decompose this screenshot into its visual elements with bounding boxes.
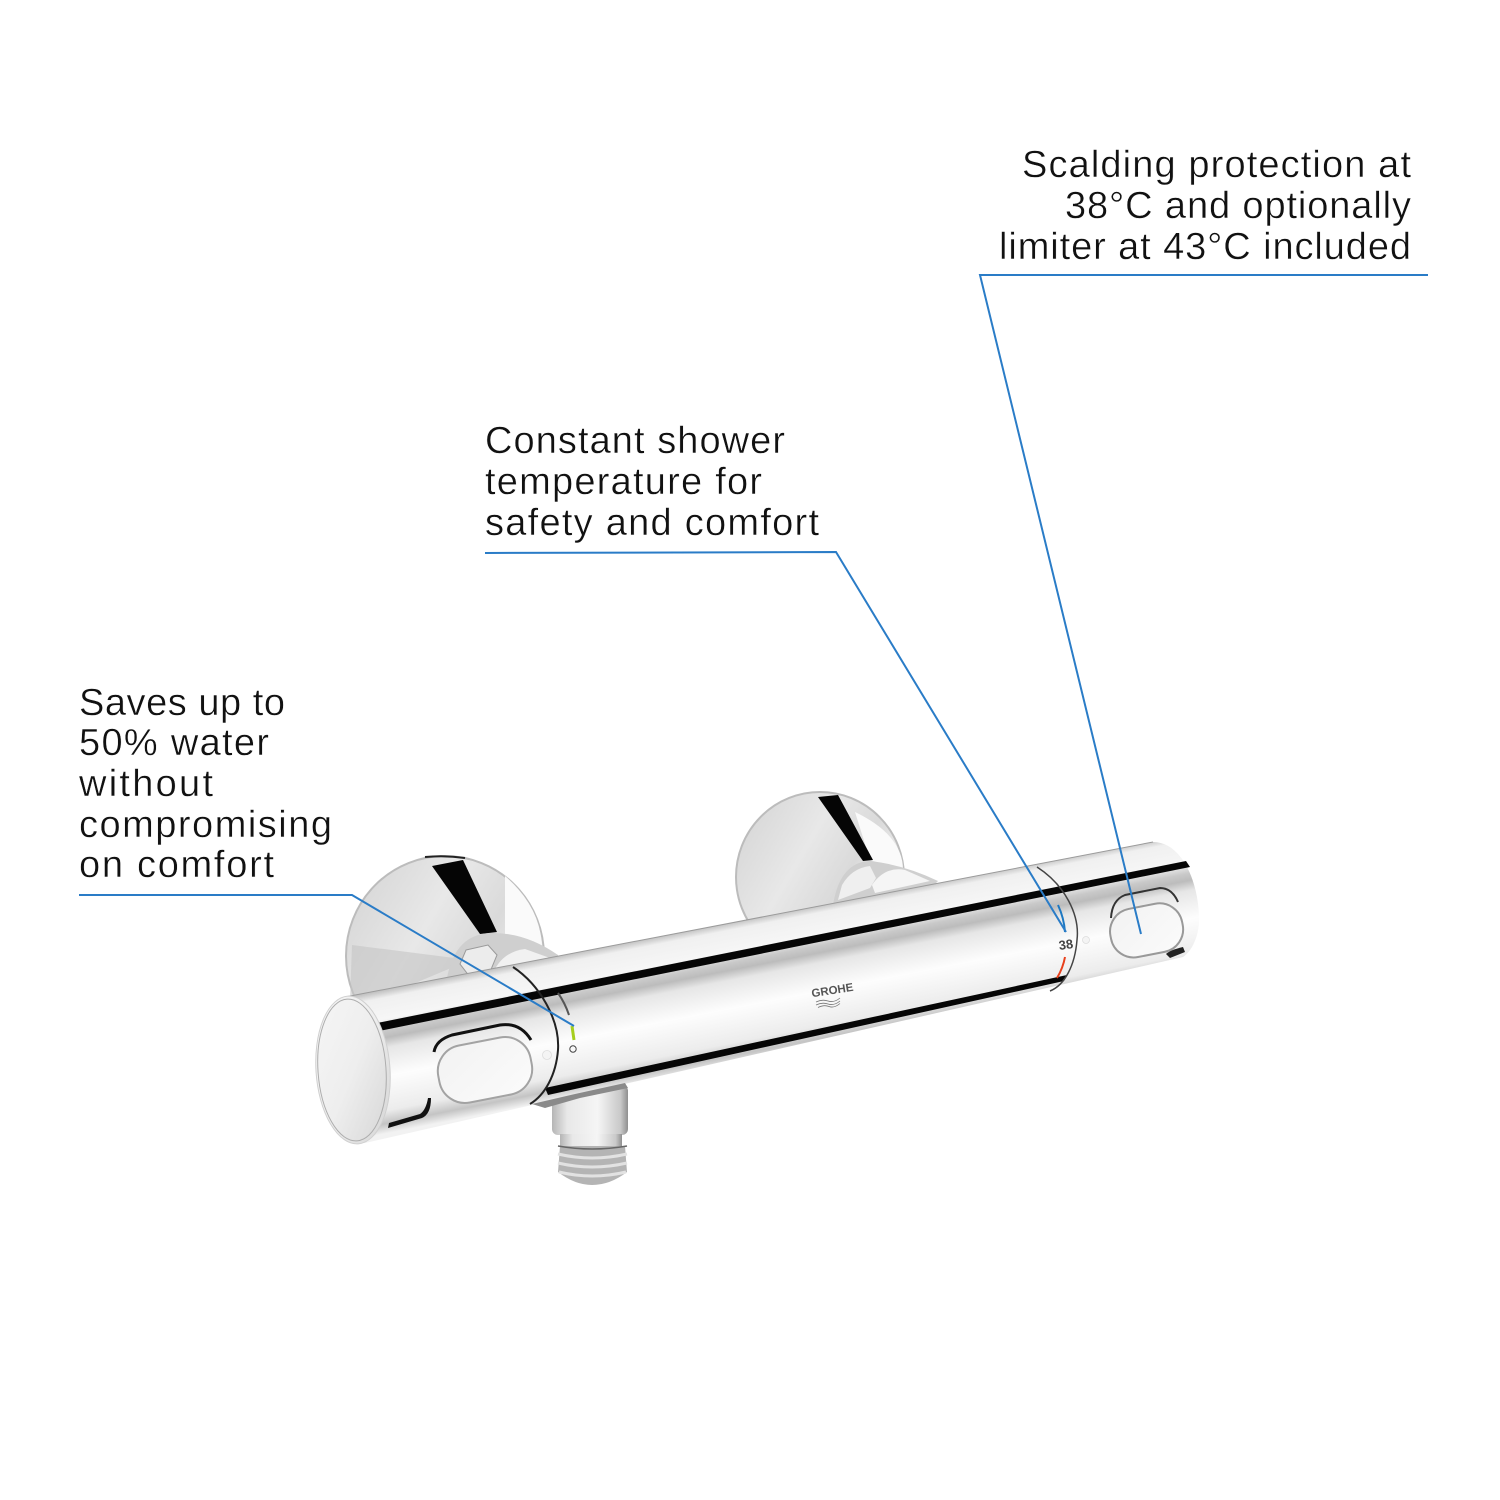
leader line: water saving (79, 895, 574, 1026)
left lower reflection (388, 1098, 431, 1128)
callout text: water saving: 50% water (79, 722, 269, 764)
callout text: constant temperature: temperature for (485, 461, 762, 503)
lower reflection band (545, 975, 1067, 1095)
leader line: scalding protection (980, 275, 1428, 934)
temperature scale: blue mark, 38 and red mark: 38 (1058, 936, 1074, 953)
callout text: constant temperature: safety and comfort (485, 502, 819, 544)
wall plate: left (346, 856, 544, 1056)
screw dots (542, 936, 1090, 1060)
control ring: right (1037, 867, 1077, 991)
callout text: water saving: compromising (79, 804, 332, 846)
eco scale: grey arc, green mark and circle (558, 993, 576, 1052)
stem: right (833, 861, 938, 910)
leader line: constant temperature (485, 552, 1066, 932)
upper reflection band (377, 861, 1190, 1031)
wall plate: right (736, 792, 904, 962)
callout text: water saving: Saves up to (79, 682, 285, 724)
callout text: constant temperature (485, 420, 819, 544)
callout text: water saving: on comfort (79, 844, 274, 886)
logo: GROHE: GROHE (811, 982, 855, 1000)
callout text: constant temperature: Constant shower (485, 420, 785, 462)
button: left (433, 1025, 537, 1107)
button: right (1106, 888, 1187, 961)
callout text: scalding protection: limiter at 43°C included (999, 226, 1411, 268)
callout text: water saving (78, 682, 332, 886)
callout text: water saving: without (78, 763, 213, 805)
temperature scale: blue mark, 38 and red mark (1057, 905, 1074, 978)
stem: left (446, 933, 558, 990)
right lower reflection (1166, 947, 1185, 958)
callout text: scalding protection (999, 144, 1411, 268)
connector: shower outlet (552, 1085, 628, 1185)
end cap (311, 994, 395, 1146)
callout text: scalding protection: 38°C and optionally (1065, 185, 1411, 227)
control ring: left (513, 967, 558, 1104)
outlet collar shadow (532, 1083, 628, 1108)
callout text: scalding protection: Scalding protection at (1022, 144, 1411, 186)
product: shower thermostat (311, 792, 1199, 1185)
thermostat body (316, 842, 1199, 1143)
